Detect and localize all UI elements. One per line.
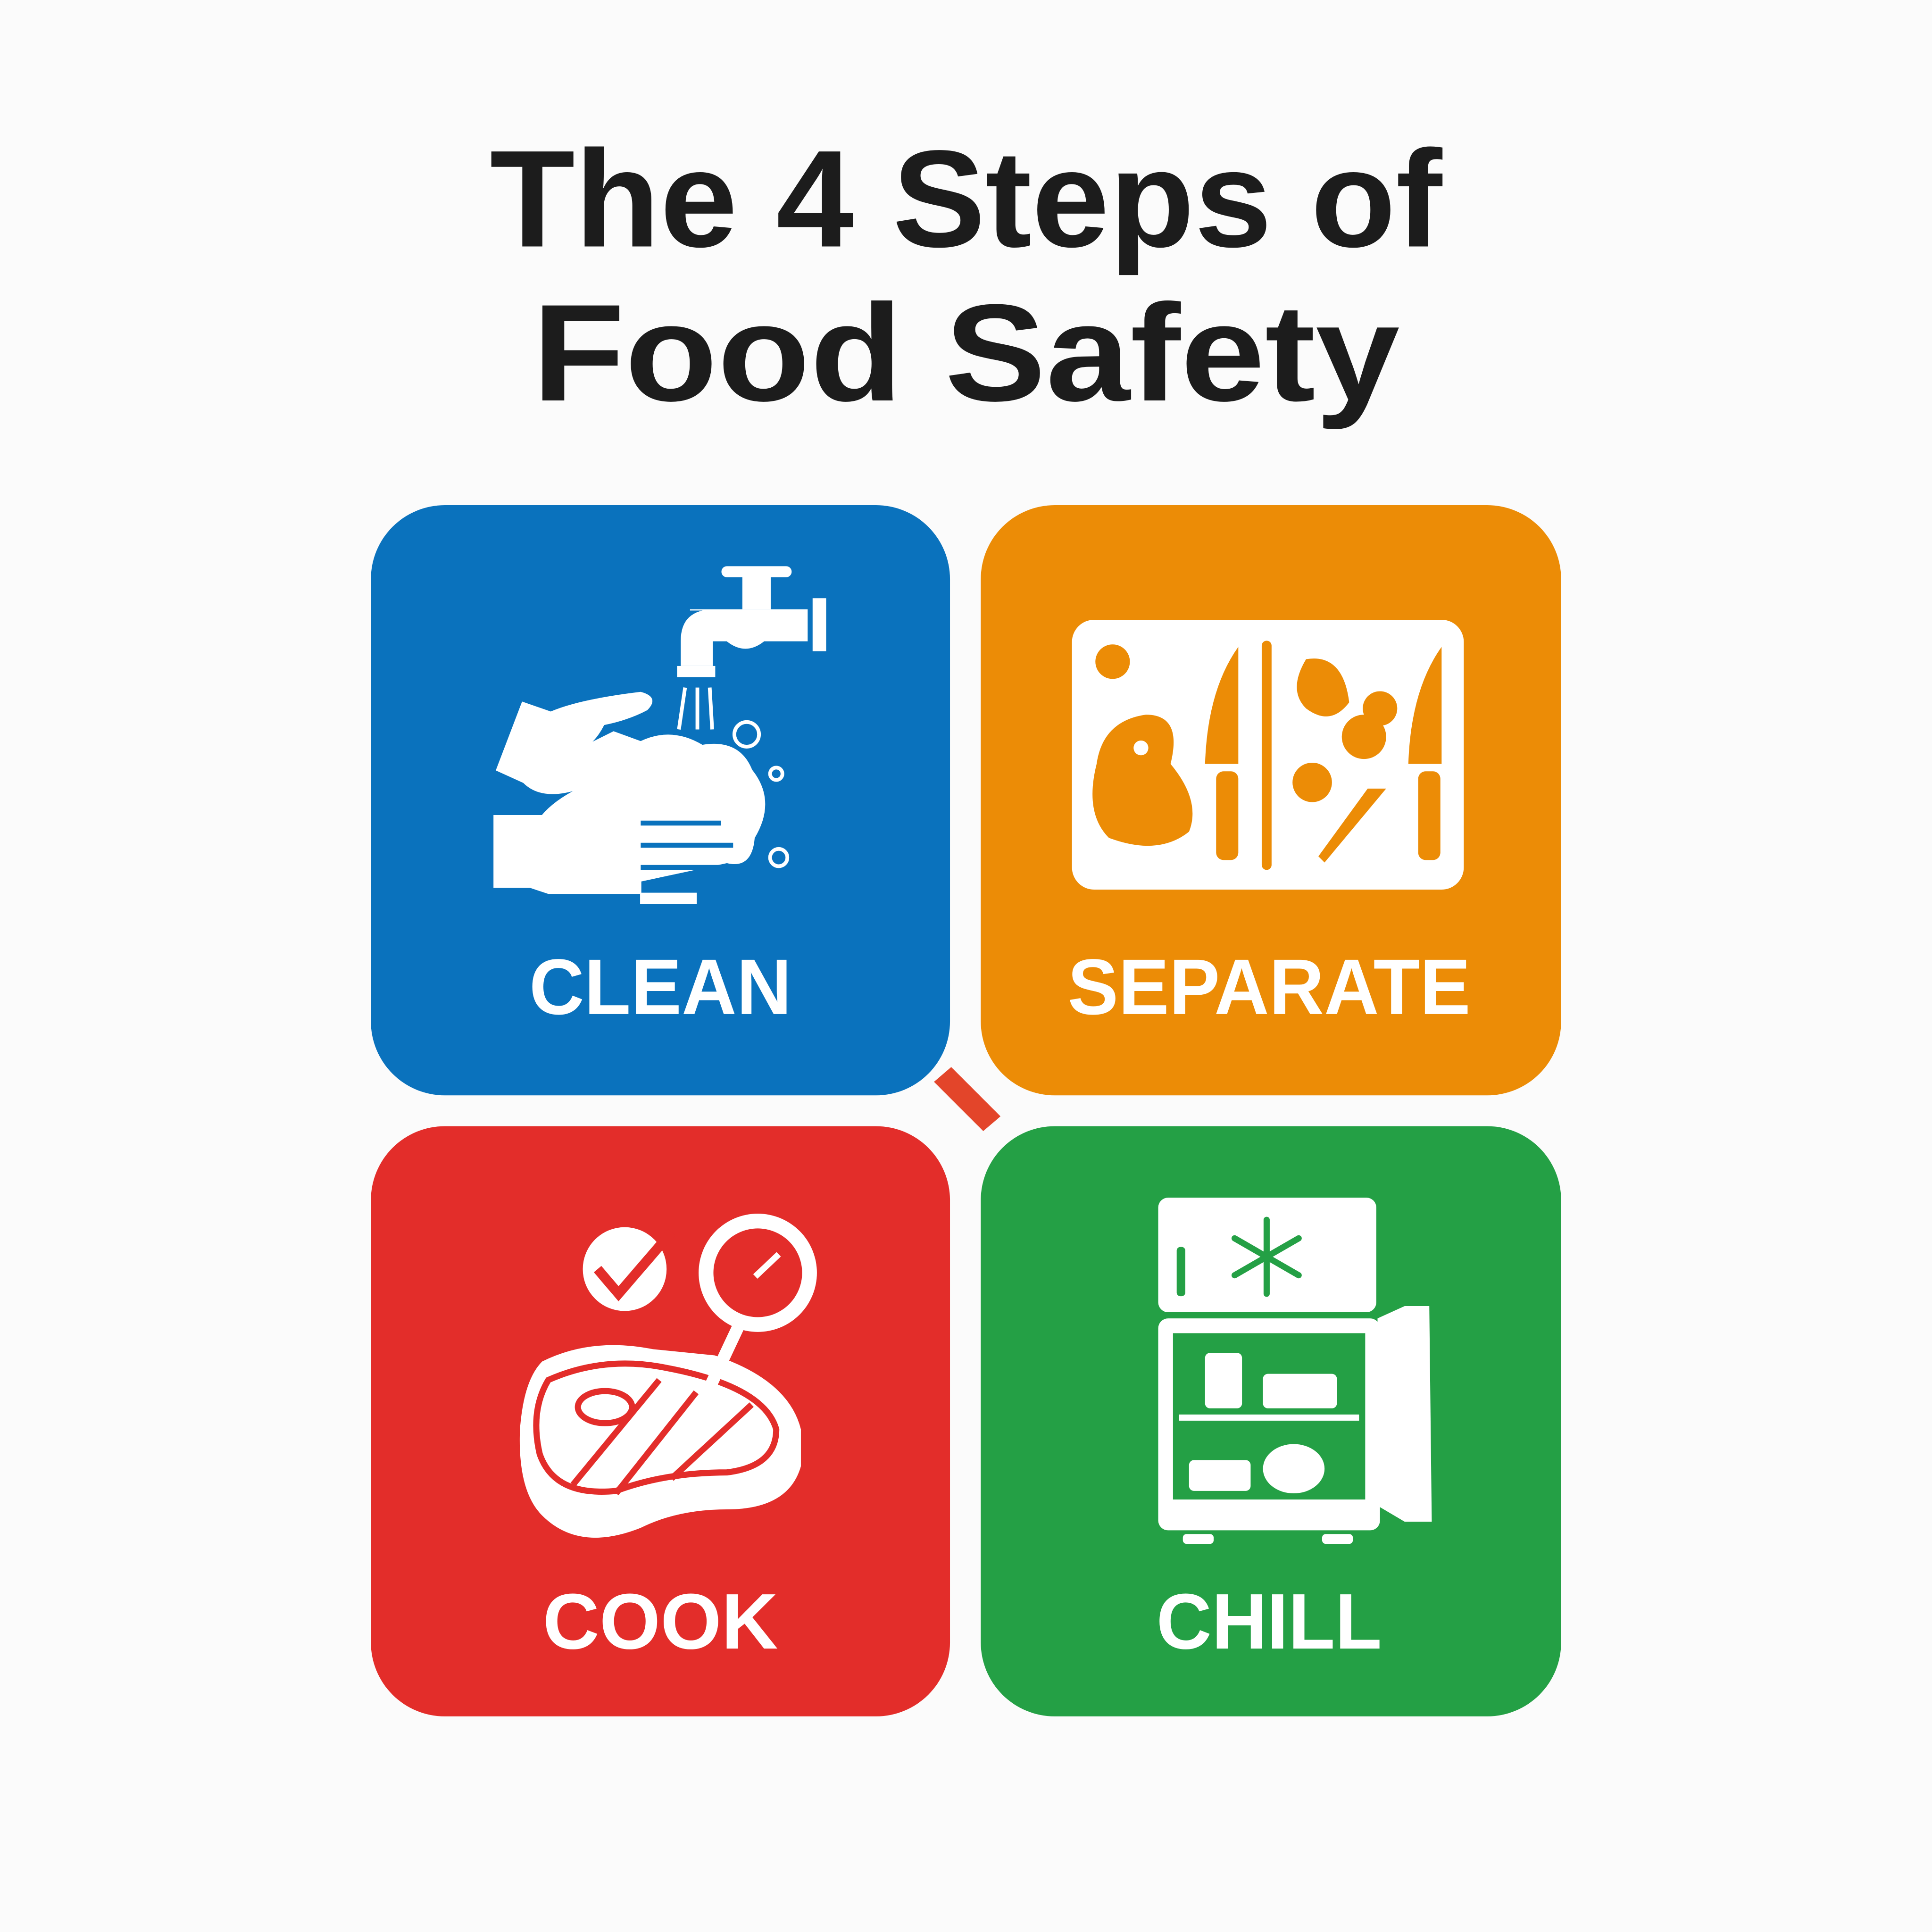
label: chill: CHILL (1157, 1578, 1382, 1666)
title: The 4 Steps of (490, 121, 1444, 276)
icon: steak and thermometer (520, 1214, 817, 1538)
label: separate: SEPARATE (1068, 943, 1471, 1031)
label: cook: COOK (543, 1578, 778, 1666)
title: Food Safety (532, 275, 1401, 431)
icon: faucet and hands (494, 567, 825, 903)
label: clean: CLEAN (529, 943, 791, 1031)
panel: separate (981, 505, 1561, 1095)
center connector (934, 1067, 1000, 1131)
panel: chill (981, 1126, 1561, 1716)
icon: fridge (1158, 1198, 1432, 1544)
panel: cook (371, 1126, 950, 1716)
icon: cutting board (1072, 620, 1464, 890)
panel: clean (371, 505, 950, 1095)
title (490, 121, 1444, 431)
